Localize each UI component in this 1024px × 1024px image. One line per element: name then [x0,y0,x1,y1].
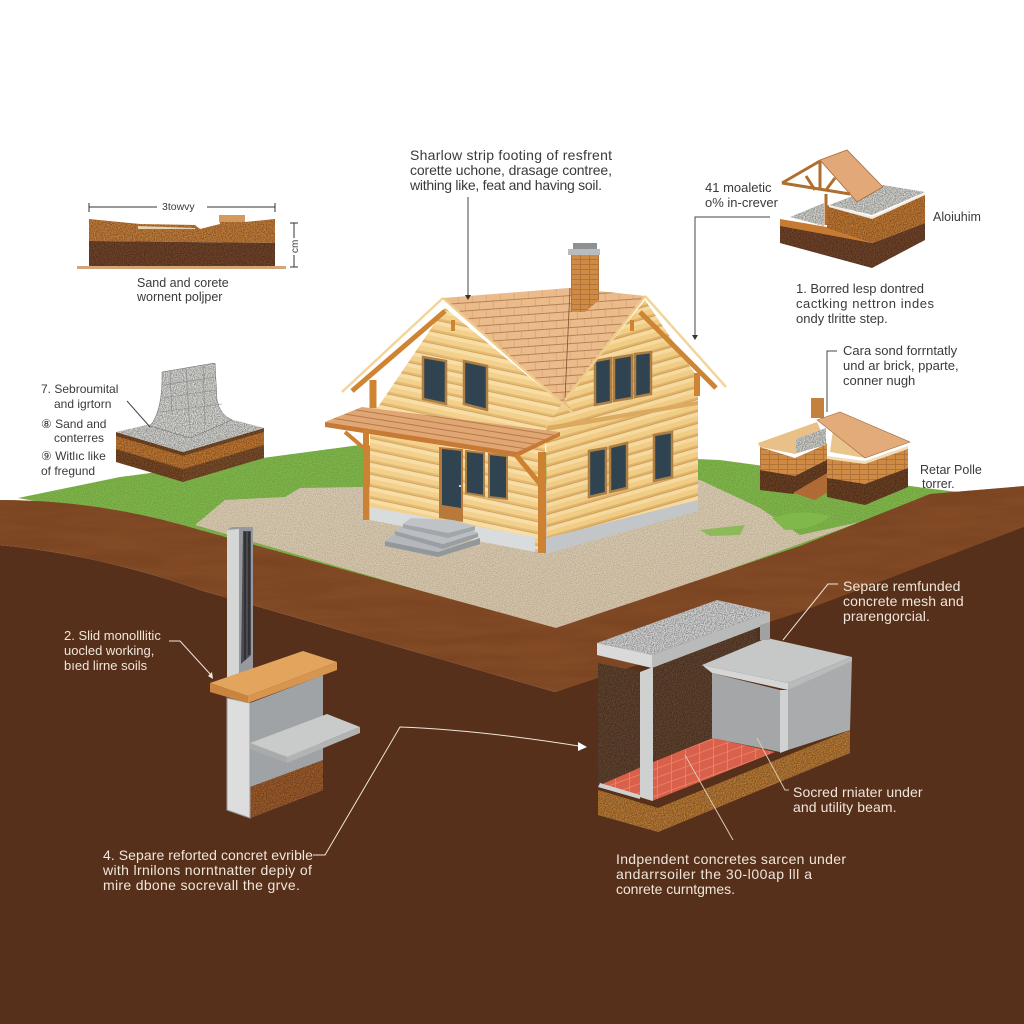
gray block [702,638,852,753]
house: right wall [546,300,698,550]
house: left gable trim [342,298,573,413]
panel: beam and slab detail [597,600,852,832]
upper column [227,527,253,686]
callout: separate reinforced mesh: Separe remfunded [843,578,961,594]
leader [127,401,150,427]
label: rebar: torrer. [922,477,955,491]
callout: separate reinforced: mire dbone socrevall the grve. [103,877,300,893]
callout: strip footing: corette uchone, drasage contree, [410,162,612,178]
soil layers [77,215,286,269]
sand base [598,730,850,832]
caption: Sand and corete [137,276,229,290]
callout: monolithic: o% in-crever [705,195,779,210]
callout: separate reinforced mesh [783,578,964,640]
text: bored: 1. Borred lesp dontred [796,281,924,296]
shelf [250,714,360,763]
callout: separate reinforced: with lrnilons norntnatter depiy of [102,862,312,878]
house: porch posts [345,430,542,553]
callout: monolithic slab: 2. Slid monolllitic [64,628,161,643]
labels: left column: and igrtorn [54,397,111,411]
callout: small house: conner nugh [843,373,915,388]
topsoil band [0,486,1024,692]
dimension: height label: cm [290,240,301,253]
column [640,667,653,801]
house: upper-right windows [595,352,651,405]
caption [136,276,229,304]
ground: grass [18,445,1024,640]
text: bored: cactking nettron indes [796,296,934,311]
callout: independent concrete: Indpendent concretes sarcen under [616,851,846,867]
callout: small house: Cara sond forrntatly [843,343,958,358]
house: lower-right windows [589,432,672,497]
callout: monolithic: 41 moaletic [705,180,772,195]
panel: strip footing cross-section [77,201,301,304]
label: aluminium: Aloiuhim [933,210,981,224]
labels: left column [41,382,118,478]
callout: utility beam: and utility beam. [793,799,897,815]
panel: small brick house [758,398,910,505]
callout: strip footing: Sharlow strip footing of resfrent [410,147,612,163]
house: right gable trim [565,296,726,400]
text: bored: ondy tlritte step. [796,311,888,326]
house: floor band [547,401,698,431]
callout: strip footing: withing like, feat and having soil. [409,177,602,193]
house: front steps [385,518,480,557]
labels: left column: of fregund [41,464,95,478]
ground: gravel pad [195,480,860,630]
house: foundation [370,500,698,554]
callout: monolithic slab [64,628,213,679]
house: left wall [370,308,573,550]
callout: small house [827,343,959,412]
callout: independent concrete: conrete curntgmes. [616,881,735,897]
callout: independent concrete [616,755,846,897]
callout: separate reinforced mesh: prarengorcial. [843,608,930,624]
callout: separate reinforced [102,727,587,893]
soil back walls [598,628,757,783]
house: porch roof [325,407,560,457]
callout: monolithic slab: bıed lirne soils [64,658,148,673]
callout: independent concrete: andarrsoiler the 30-l00ap lll a [616,866,812,882]
labels: left column: 7. Sebroumital [41,382,118,396]
dimension: height [290,223,298,267]
wood plate [210,651,337,703]
callout: utility beam: Socred rniater under [793,784,923,800]
panel: truss on block [780,150,925,268]
labels: left column: ⑨ Witlıc like [41,449,106,463]
label: rebar [920,463,982,491]
callout: monolithic slab: uocled working, [64,643,154,658]
labels: left column: conterres [54,431,104,445]
top slab [597,600,770,668]
callout: separate reinforced mesh: concrete mesh and [843,593,964,609]
label: rebar: Retar Polle [920,463,982,477]
deep soil layer [0,525,1024,1024]
callout: small house: und ar brick, pparte, [843,358,959,373]
frame base [598,783,640,799]
red mesh floor [600,738,775,801]
callout: separate reinforced: 4. Separe reforted concret evrible [103,847,313,863]
panel: retaining wall block [116,363,264,482]
house: chimney [568,243,600,312]
dimension: width [89,203,275,212]
callout: utility beam [757,738,923,815]
house: door and door windows [439,447,507,522]
callout: strip footing [409,147,612,300]
house [325,243,726,557]
house: main roof [443,288,645,413]
lower wall [227,675,323,818]
house: upper-left windows [423,357,487,410]
callout: monolithic [692,180,779,340]
dimension: width label: 3towvy [162,201,195,213]
caption: wornent poljper [136,290,222,304]
text: bored [796,281,934,326]
panel: column footing detail [210,527,360,818]
labels: left column: ⑧ Sand and [41,417,106,431]
